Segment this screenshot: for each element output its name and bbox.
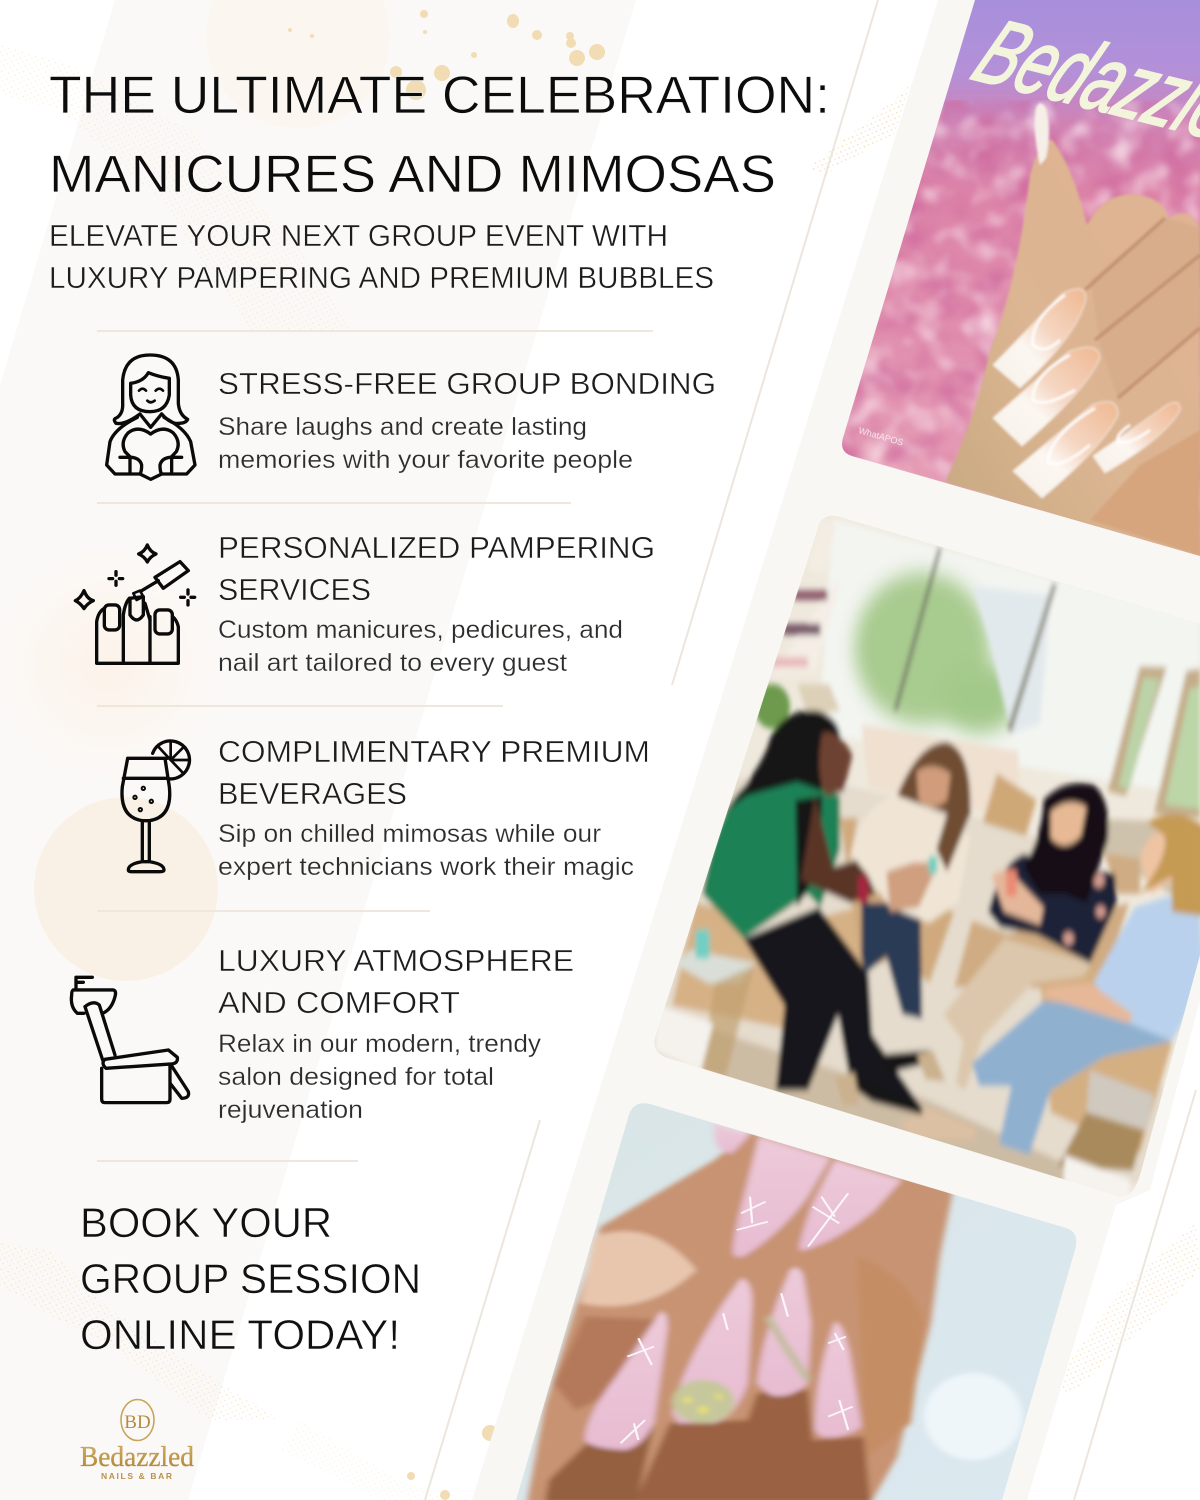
logo: Bedazzled Nails & Bar: BD <box>124 1412 151 1433</box>
description: salon designed for total <box>218 1063 494 1091</box>
description <box>218 1030 542 1124</box>
tables <box>677 950 756 983</box>
icon: woman holding a heart <box>107 355 195 479</box>
subtitle: LUXURY PAMPERING AND PREMIUM BUBBLES <box>49 260 714 295</box>
description: nail art tailored to every guest <box>218 649 567 677</box>
diagonal hairlines <box>425 0 1196 1500</box>
lower nails <box>585 1312 668 1450</box>
heading: BEVERAGES <box>218 776 407 811</box>
heading: STRESS-FREE GROUP BONDING <box>218 366 716 401</box>
hand <box>945 103 1200 570</box>
icon: salon shampoo chair <box>71 977 189 1103</box>
heading <box>218 530 655 607</box>
icon: mimosa glass with citrus slice <box>122 741 189 872</box>
photo: women laughing in the salon <box>640 510 1200 1224</box>
woman in blue shirt <box>972 1001 1172 1155</box>
item: personalized pampering services <box>75 530 655 677</box>
chairs <box>672 903 872 1028</box>
woman in green jacket <box>744 907 922 1108</box>
subtitle: ELEVATE YOUR NEXT GROUP EVENT WITH <box>49 218 668 253</box>
upper nails <box>714 1123 750 1153</box>
nails <box>993 289 1180 498</box>
floor <box>705 1032 1066 1180</box>
logo: Bedazzled Nails & Bar <box>80 1400 194 1481</box>
shelves <box>808 519 836 572</box>
call to action: BOOK YOUR <box>80 1199 332 1246</box>
description <box>218 820 634 881</box>
description: expert technicians work their magic <box>218 853 634 881</box>
description: Share laughs and create lasting <box>218 413 587 441</box>
nail line art <box>621 1193 853 1443</box>
call to action <box>80 1199 421 1358</box>
watermark: WhatAPOS <box>857 425 904 448</box>
call to action: GROUP SESSION <box>80 1255 421 1302</box>
heading <box>218 943 574 1020</box>
subtitle <box>49 218 714 295</box>
gold splatter dots <box>288 10 605 1500</box>
photo frame band <box>472 0 1200 1500</box>
call to action: ONLINE TODAY! <box>80 1311 400 1358</box>
description: Relax in our modern, trendy <box>218 1030 542 1058</box>
icon: nails with polish brush and sparkles <box>75 545 195 663</box>
title <box>49 66 830 204</box>
heading: SERVICES <box>218 572 371 607</box>
item: complimentary premium beverages <box>122 734 650 881</box>
item: luxury atmosphere and comfort <box>71 943 574 1124</box>
heading: COMPLIMENTARY PREMIUM <box>218 734 650 769</box>
description <box>218 413 633 474</box>
title: MANICURES AND MIMOSAS <box>49 145 776 204</box>
description: Sip on chilled mimosas while our <box>218 820 601 848</box>
salon interior <box>640 519 1200 1210</box>
description: rejuvenation <box>218 1096 363 1124</box>
logo: Bedazzled Nails & Bar: NAILS & BAR <box>101 1471 172 1481</box>
title: THE ULTIMATE CELEBRATION: <box>49 66 830 125</box>
heading: LUXURY ATMOSPHERE <box>218 943 574 978</box>
description: memories with your favorite people <box>218 446 633 474</box>
heading: AND COMFORT <box>218 985 460 1020</box>
logo: Bedazzled Nails & Bar: Bedazzled <box>80 1441 194 1473</box>
description <box>218 616 623 677</box>
photo: pink stiletto nails with crystal art <box>516 1103 1076 1500</box>
heading <box>218 734 650 811</box>
photo: hand with french nails against flower wall <box>830 0 1200 570</box>
item: stress-free group bonding <box>107 355 716 479</box>
ottomans <box>654 1006 713 1072</box>
description: Custom manicures, pedicures, and <box>218 616 623 644</box>
woman in cream sweater <box>861 903 922 1019</box>
heading: PERSONALIZED PAMPERING <box>218 530 655 565</box>
feet and shoes <box>902 1110 974 1139</box>
woman in floral blouse <box>944 939 1092 1090</box>
